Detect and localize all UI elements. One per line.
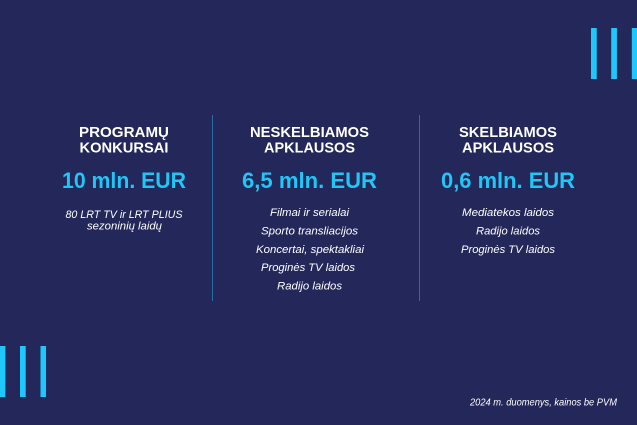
list: program types [256,207,365,292]
heading: skelbiamos apklausos: SKELBIAMOS [459,124,557,141]
icon: top right decorative bars [591,28,637,79]
heading: neskelbiamos apklausos: APKLAUSOS [264,140,355,156]
text block: description: sezoninių laidų [87,220,162,232]
heading: skelbiamos apklausos: APKLAUSOS [462,140,554,156]
divider right [419,115,420,301]
text block: description: 80 LRT TV ir LRT PLIUS [66,209,183,221]
heading: neskelbiamos apklausos: NESKELBIAMOS [250,124,369,141]
list: program types [461,207,556,256]
list: program types: Proginės TV laidos [261,262,356,274]
panel: skelbiamos apklausos [441,124,575,256]
divider left [212,115,213,301]
list: program types: Filmai ir serialai [270,207,350,219]
list: program types: Sporto transliacijos [261,226,359,238]
footnote: 2024 m. duomenys, kainos be PVM [469,398,618,408]
panel: programų konkursai [62,124,186,232]
list: program types: Proginės TV laidos [461,244,556,256]
text block: description [66,209,183,232]
amount: 10 mln. EUR: 10 mln. EUR [62,168,186,193]
list: program types: Koncertai, spektakliai [256,244,365,256]
amount: 0,6 mln. EUR: 0,6 mln. EUR [441,168,575,193]
list: program types: Radijo laidos [476,226,541,238]
icon: bottom left decorative bars [0,346,46,397]
amount: 6,5 mln. EUR: 6,5 mln. EUR [242,168,377,193]
list: program types: Radijo laidos [277,280,343,292]
heading: programų konkursai: PROGRAMŲ [79,124,169,141]
heading: skelbiamos apklausos [459,124,557,156]
panel: neskelbiamos apklausos [242,124,377,292]
heading: programų konkursai [79,124,169,156]
heading: neskelbiamos apklausos [250,124,369,156]
list: program types: Mediatekos laidos [462,207,555,219]
heading: programų konkursai: KONKURSAI [80,140,168,156]
